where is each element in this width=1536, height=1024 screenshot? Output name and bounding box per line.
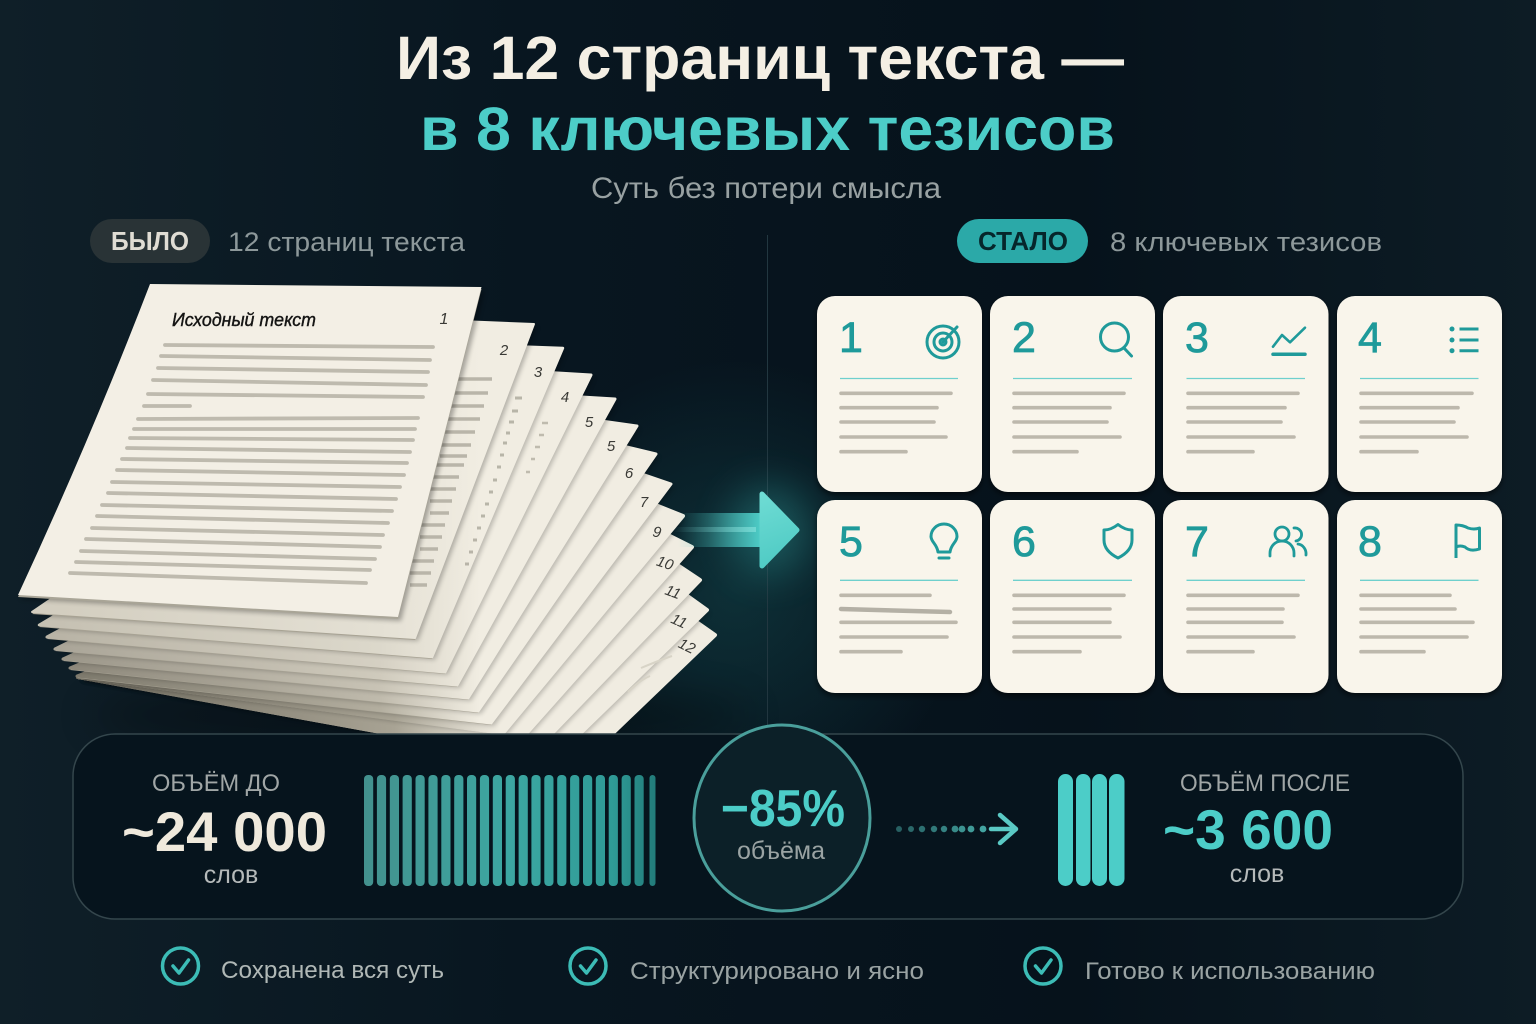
- subtitle: Суть без потери смысла: [591, 172, 941, 205]
- volume before: ОБЪЁМ ДО: [152, 770, 280, 797]
- card 7: [1163, 500, 1328, 693]
- card 3: [1163, 296, 1328, 492]
- before label: 12 страниц текста: [228, 227, 466, 257]
- central arrow: [672, 485, 810, 575]
- card 6: 6: [1012, 518, 1036, 566]
- text lines on top page: [70, 345, 433, 583]
- dotted arrow: [896, 815, 1016, 843]
- title: в 8 ключевых тезисов: [420, 95, 1115, 163]
- volume before: ~24 000: [122, 800, 327, 863]
- page numbers on fan: 4: [561, 389, 569, 406]
- cards grid: [817, 296, 1502, 693]
- card 2: [990, 296, 1155, 492]
- page numbers on fan: 9: [651, 523, 663, 542]
- reduction circle: −85%: [721, 780, 845, 838]
- card 8: 8: [1358, 518, 1382, 566]
- card 2: 2: [1012, 314, 1036, 362]
- before label: [90, 219, 466, 263]
- after label: [957, 219, 1382, 263]
- card 1: [817, 296, 982, 492]
- page number 1: 1: [440, 311, 448, 328]
- volume after: ~3 600: [1163, 798, 1333, 861]
- card 1: 1: [839, 314, 863, 362]
- page numbers on fan: 5: [585, 414, 594, 431]
- card 4: 4: [1358, 314, 1382, 362]
- card 5: 5: [839, 518, 863, 566]
- volume before: слов: [204, 861, 258, 889]
- title: [396, 24, 1124, 163]
- page numbers on fan: 12: [676, 635, 699, 658]
- page numbers on fan: 5: [607, 438, 616, 455]
- volume after: [1163, 770, 1350, 888]
- reduction circle: [694, 725, 870, 911]
- card 6: [990, 500, 1155, 693]
- stats panel: [73, 725, 1463, 919]
- page numbers on fan: 7: [640, 494, 649, 511]
- long bar chart: [364, 775, 656, 886]
- after label: СТАЛО: [978, 226, 1068, 256]
- volume after: ОБЪЁМ ПОСЛЕ: [1180, 770, 1350, 797]
- volume before: [122, 770, 327, 889]
- card 8: [1337, 500, 1502, 693]
- card 4: [1337, 296, 1502, 492]
- heading on top page: Исходный текст: [172, 310, 316, 330]
- short bar chart: [1058, 774, 1124, 886]
- card 7: 7: [1185, 518, 1209, 566]
- benefit: essence preserved: [162, 948, 444, 984]
- title: Из 12 страниц текста —: [396, 24, 1124, 92]
- page numbers on fan: 3: [534, 364, 543, 381]
- benefit: essence preserved: Сохранена вся суть: [221, 957, 444, 984]
- before label: БЫЛО: [111, 226, 189, 256]
- benefit: structured and clear: [570, 948, 924, 985]
- card 5: [817, 500, 982, 693]
- page numbers on fan: 11: [663, 582, 683, 603]
- after label: 8 ключевых тезисов: [1110, 227, 1382, 257]
- card 3: 3: [1185, 314, 1209, 362]
- page numbers on fan: 6: [625, 465, 634, 482]
- page numbers on fan: 2: [499, 342, 509, 359]
- top page: [18, 284, 484, 621]
- reduction circle: объёма: [737, 837, 825, 865]
- page numbers on fan: [499, 342, 699, 658]
- benefit: structured and clear: Структурировано и ясно: [630, 958, 924, 985]
- page numbers on fan: 10: [654, 553, 676, 574]
- page stack: [18, 284, 750, 758]
- page numbers on fan: 11: [668, 611, 689, 632]
- benefit: ready to use: Готово к использованию: [1085, 958, 1375, 985]
- volume after: слов: [1230, 860, 1284, 888]
- benefit: ready to use: [1025, 948, 1375, 985]
